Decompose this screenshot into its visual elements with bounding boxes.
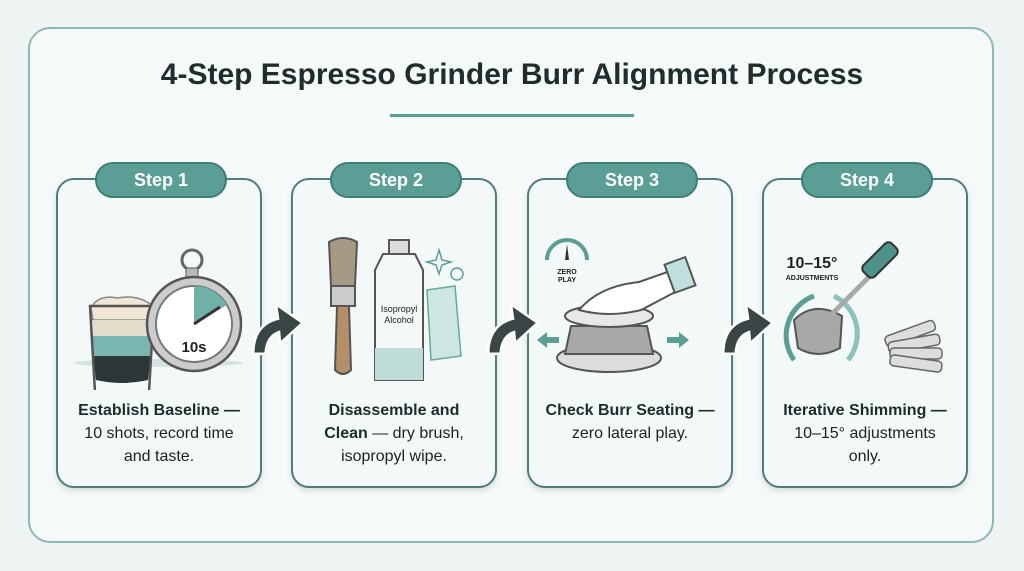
- title underline: [390, 114, 634, 117]
- icon: hand on burr with gauge: ZERO: [557, 269, 577, 276]
- text: step 2: isopropyl wipe.: [341, 448, 447, 465]
- icon: hand on burr with gauge: PLAY: [558, 277, 576, 284]
- step 1 badge: Step 1: [134, 170, 188, 190]
- panel: step 2: [291, 178, 497, 488]
- arrow 2: [487, 302, 540, 356]
- panel: step 4: [762, 178, 968, 488]
- text: step 3: [546, 402, 714, 442]
- text: step 3: Check Burr Seating —: [546, 402, 714, 419]
- text: step 4: only.: [849, 448, 881, 465]
- arrow 1: [252, 302, 304, 356]
- icon: espresso glass and stopwatch: 10s: [181, 339, 207, 356]
- step 2 badge: Step 2: [369, 170, 423, 190]
- icon: burr, screwdriver and shims: ADJUSTMENTS: [786, 275, 839, 282]
- text: step 1: 10 shots, record time: [84, 425, 234, 442]
- text: step 4: Iterative Shimming —: [783, 402, 947, 419]
- title: 4-Step Espresso Grinder Burr Alignment Process: [161, 58, 863, 91]
- icon: burr, screwdriver and shims: 10–15°: [787, 255, 837, 272]
- text: step 2: Clean — dry brush,: [324, 425, 464, 442]
- icon: brush and isopropyl bottle: [328, 237, 464, 381]
- panel: step 1: [56, 178, 262, 488]
- text: step 4: [783, 402, 947, 465]
- text: step 1: Establish Baseline —: [78, 402, 240, 419]
- icon: burr, screwdriver and shims: [784, 241, 943, 373]
- step 1 badge: [95, 162, 227, 198]
- icon: hand on burr with gauge: [537, 238, 697, 373]
- step 3 badge: [566, 162, 698, 198]
- text: step 3: zero lateral play.: [572, 425, 688, 442]
- icon: espresso glass and stopwatch: [73, 248, 243, 390]
- step 4 badge: [801, 162, 933, 198]
- icon: brush and isopropyl bottle: Alcohol: [384, 315, 414, 325]
- text: step 2: Disassemble and: [329, 402, 459, 419]
- icon: brush and isopropyl bottle: Isopropyl: [381, 304, 417, 314]
- text: step 1: and taste.: [124, 448, 194, 465]
- text: step 1: [78, 402, 240, 465]
- step 3 badge: Step 3: [605, 170, 659, 190]
- arrow 3: [722, 302, 774, 356]
- text: step 4: 10–15° adjustments: [794, 425, 936, 442]
- text: step 2: [324, 402, 464, 465]
- step 4 badge: Step 4: [840, 170, 894, 190]
- panel: step 3: [527, 178, 733, 488]
- step 2 badge: [330, 162, 462, 198]
